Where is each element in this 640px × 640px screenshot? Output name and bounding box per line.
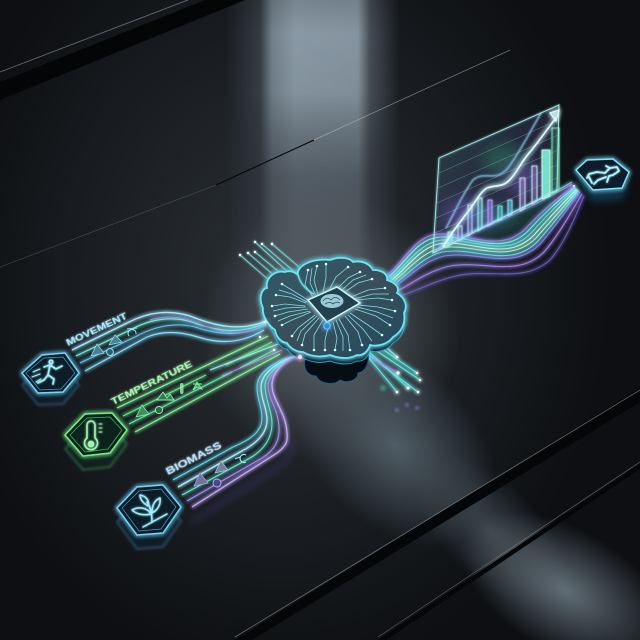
cow output hexagon	[576, 159, 629, 202]
chart secondary trend line	[446, 113, 541, 228]
icon: plant	[132, 495, 167, 527]
central chip	[308, 287, 360, 322]
chart main trend arrow	[443, 110, 559, 247]
hexagon: temperature	[65, 413, 127, 470]
movement data glyphs	[91, 328, 137, 356]
lobe crease	[298, 275, 314, 294]
brain upper-left data pins	[239, 241, 312, 295]
core node	[324, 323, 330, 329]
central brain processor	[261, 258, 406, 383]
hexagon: biomass	[117, 485, 181, 549]
label: BIOMASS: BIOMASS	[164, 440, 224, 478]
chart frame	[433, 105, 559, 253]
biomass data glyphs	[194, 454, 246, 487]
chart bars	[448, 128, 559, 246]
fibre bundle: brain to cow output	[383, 182, 584, 298]
faint pin reflections	[380, 385, 419, 412]
temperature data glyphs	[136, 382, 202, 417]
brain top surface	[261, 258, 406, 358]
brain edge thickness	[263, 314, 404, 364]
mini brain on chip	[320, 294, 344, 308]
reflection of biomass fibres	[192, 440, 291, 522]
brain lower-right data pins	[360, 338, 421, 393]
seams	[0, 0, 245, 100]
circuit traces	[272, 264, 395, 351]
input fibres: movement	[72, 312, 266, 371]
input fibres: biomass	[173, 356, 298, 507]
brain reflection below	[304, 350, 369, 383]
chart colour haze	[444, 144, 545, 234]
reflection under chart panel	[433, 192, 557, 282]
icon: thermometer	[84, 421, 102, 450]
icon: running person	[32, 360, 62, 384]
input fibres: temperature	[117, 336, 282, 432]
icon: cow	[587, 166, 619, 184]
label: TEMPERATURE: TEMPERATURE	[109, 359, 194, 408]
label: MOVEMENT: MOVEMENT	[65, 311, 129, 348]
junction glow points	[259, 185, 575, 359]
chart panel	[433, 105, 559, 253]
hexagon: movement	[22, 353, 79, 405]
circuit nodes	[271, 263, 396, 351]
chart grid lines	[435, 120, 558, 233]
